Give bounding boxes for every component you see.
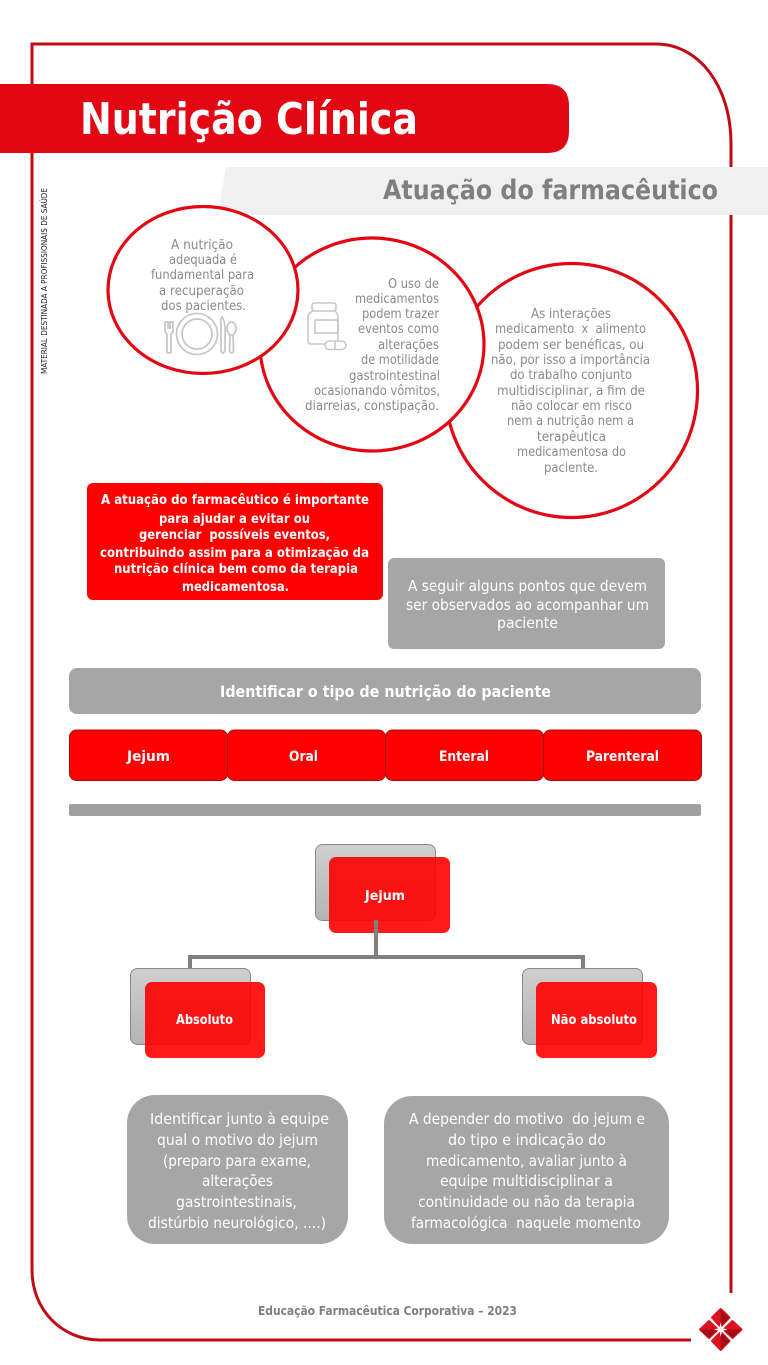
callout: points to observe (388, 558, 665, 649)
note: non-absolute fasting: farmacológica naquele momento (411, 1214, 641, 1232)
tab: Parenteral (544, 730, 702, 780)
callout: points to observe: ser observados ao acompanhar um (406, 596, 649, 614)
circle: medication events: alterações (378, 338, 439, 353)
title banner (0, 84, 569, 153)
side note: MATERIAL DESTINADA A PROFISSIONAIS DE SAÚDE (38, 188, 49, 374)
circle: medication events: eventos como (358, 322, 439, 337)
callout: points to observe: paciente (497, 614, 558, 632)
callout: pharmacist role: A atuação do farmacêutico é importante (101, 493, 369, 508)
circle: medication events (260, 238, 484, 451)
tab: Enteral: Enteral (439, 749, 489, 765)
circle: drug-food interactions: As interações (531, 307, 611, 322)
icon: medicine bottle and pill (308, 303, 346, 350)
circle: drug-food interactions: terapêutica (537, 430, 606, 445)
node: Absoluto (130, 968, 265, 1058)
circle: adequate nutrition: a recuperação (159, 284, 244, 299)
circle: adequate nutrition: dos pacientes. (161, 299, 246, 314)
circle: drug-food interactions: não colocar em risco (511, 399, 632, 414)
note: non-absolute fasting: medicamento, avaliar junto à (426, 1152, 627, 1170)
icon: plate and cutlery (165, 314, 236, 354)
circle: medication events: de motilidade (361, 353, 439, 368)
tab: Parenteral: Parenteral (586, 749, 659, 765)
circle: medication events: medicamentos (355, 292, 439, 307)
title banner: Nutrição Clínica (80, 94, 418, 145)
circle: drug-food interactions: nem a nutrição nem a (507, 414, 634, 429)
callout: points to observe: A seguir alguns pontos que devem (408, 577, 647, 595)
circle: drug-food interactions: podem ser benéficas, ou (498, 338, 644, 353)
circle: adequate nutrition (108, 206, 298, 374)
circle: medication events: O uso de (388, 277, 439, 292)
footer credit: Educação Farmacêutica Corporativa – 2023 (258, 1304, 517, 1318)
tab: Enteral (386, 730, 544, 780)
circle: drug-food interactions: medicamentosa do (517, 445, 626, 460)
note: absolute fasting: Identificar junto à equipe (150, 1110, 329, 1128)
note: absolute fasting: (preparo para exame, (163, 1152, 311, 1170)
note: absolute fasting: distúrbio neurológico, ....) (148, 1214, 326, 1232)
icon: cross logo (700, 1309, 742, 1350)
note: absolute fasting: gastrointestinais, (176, 1193, 297, 1211)
nutrition type tabs (70, 730, 702, 780)
circle: medication events: podem trazer (362, 307, 440, 322)
circle: drug-food interactions: paciente. (544, 461, 598, 476)
callout: pharmacist role: gerenciar possíveis eventos, (139, 528, 330, 543)
circle: drug-food interactions (446, 264, 698, 518)
node: Não absoluto (522, 968, 657, 1058)
subtitle band (218, 167, 768, 215)
callout: pharmacist role: contribuindo assim para a otimização da (100, 546, 369, 561)
circle: drug-food interactions: multidisciplinar, a fim de (497, 384, 645, 399)
node: Jejum: Jejum (364, 889, 405, 904)
heading: identify nutrition type (69, 668, 701, 714)
circle: drug-food interactions: medicamento x alimento (495, 322, 646, 337)
circle: drug-food interactions: não, por isso a importância (491, 353, 650, 368)
note: absolute fasting: alterações (202, 1172, 273, 1190)
note: non-absolute fasting: do tipo e indicação do (448, 1131, 606, 1149)
tab: Oral: Oral (289, 749, 318, 765)
node: Não absoluto: Não absoluto (551, 1013, 637, 1028)
tab: Jejum (70, 730, 228, 780)
note: non-absolute fasting: equipe multidisciplinar a (440, 1172, 613, 1190)
note: non-absolute fasting (384, 1096, 669, 1244)
callout: pharmacist role: medicamentosa. (182, 580, 289, 595)
circle: medication events: gastrointestinal (349, 369, 440, 384)
subtitle band: Atuação do farmacêutico (383, 175, 718, 206)
heading: identify nutrition type: Identificar o tipo de nutrição do paciente (220, 682, 551, 701)
node: Jejum (316, 844, 450, 933)
tab: Jejum: Jejum (126, 749, 170, 765)
callout: pharmacist role (87, 483, 383, 600)
circle: adequate nutrition: A nutrição (171, 238, 233, 253)
callout: pharmacist role: para ajudar a evitar ou (159, 512, 310, 527)
node: Absoluto: Absoluto (176, 1013, 233, 1028)
note: absolute fasting (127, 1095, 348, 1244)
circle: medication events: diarreias, constipação. (305, 399, 439, 414)
circle: medication events: ocasionando vômitos, (314, 384, 440, 399)
callout: pharmacist role: nutrição clínica bem como da terapia (114, 562, 358, 577)
note: absolute fasting: qual o motivo do jejum (157, 1131, 318, 1149)
note: non-absolute fasting: continuidade ou não da terapia (418, 1193, 635, 1211)
circle: adequate nutrition: fundamental para (151, 268, 254, 283)
connector lines (190, 920, 583, 968)
circle: drug-food interactions: do trabalho conjunto (510, 368, 632, 383)
tab: Oral (228, 730, 386, 780)
org chart: fasting (130, 844, 657, 1058)
circle: adequate nutrition: adequada é (169, 253, 237, 268)
note: non-absolute fasting: A depender do motivo do jejum e (409, 1110, 645, 1128)
